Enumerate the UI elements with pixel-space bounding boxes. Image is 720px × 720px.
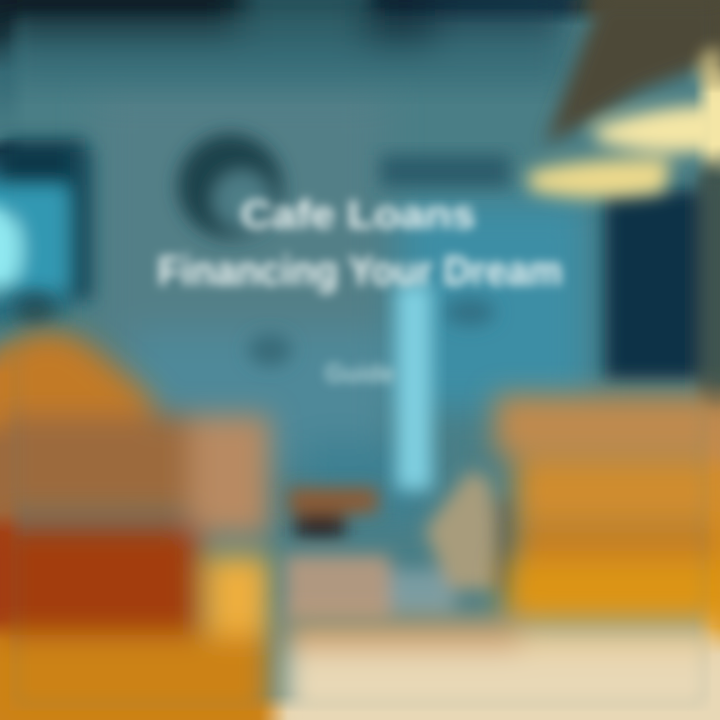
small dark wall marks [15, 294, 495, 366]
left window [0, 140, 92, 320]
title line 2: Financing Your Dream [158, 247, 562, 294]
headline text [158, 193, 562, 388]
title line 1: Cafe Loans [240, 193, 476, 237]
small caption: Guide [325, 358, 395, 388]
right orange armchair [495, 395, 720, 625]
right dark window [605, 170, 720, 410]
cream table foreground [285, 620, 720, 720]
dark ceiling [0, 0, 570, 80]
centre table items [285, 470, 517, 620]
round wall emblem [178, 134, 282, 238]
window centre [380, 155, 510, 187]
left orange armchair [0, 331, 270, 720]
background wall [95, 90, 590, 520]
pendant lamp [528, 0, 720, 198]
bright vertical light [396, 285, 432, 490]
